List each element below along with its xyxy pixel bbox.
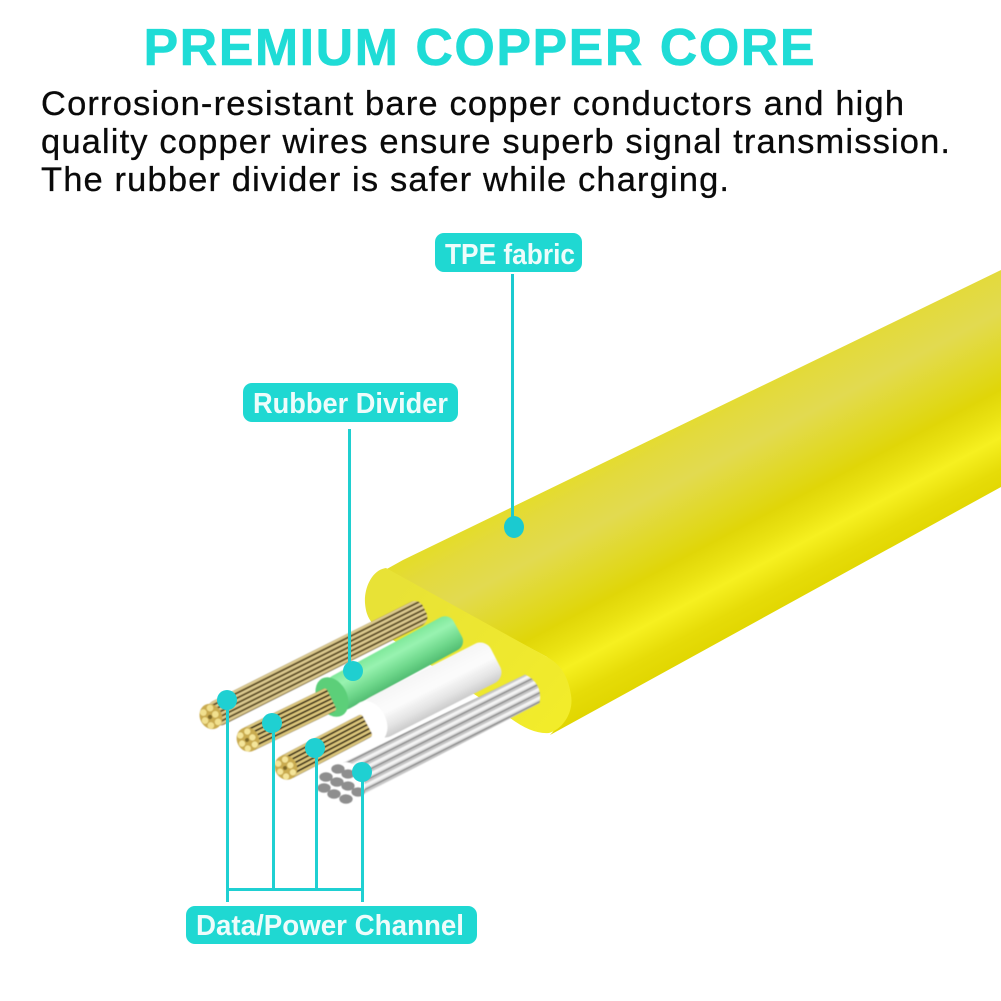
label: Rubber Divider: Rubber Divider: [253, 388, 448, 420]
silver wire end strands: [317, 764, 365, 804]
yellow cable: [365, 270, 1001, 735]
title: PREMIUM COPPER CORE: [144, 19, 814, 77]
green rubber divider: [309, 611, 468, 723]
white insulated tube: [346, 638, 506, 749]
lower copper wire: [270, 714, 373, 784]
description text: Corrosion-resistant bare copper conductors and high: [41, 85, 904, 123]
description text: [41, 85, 950, 199]
pointer: Rubber Divider: [343, 429, 363, 681]
middle copper wire: [233, 688, 337, 756]
description text: quality copper wires ensure superb signal transmission.: [41, 123, 950, 161]
pointer: TPE fabric: [504, 274, 524, 538]
label: TPE fabric: TPE fabric: [445, 239, 575, 271]
silver wire: [332, 669, 546, 802]
cable end cap: [365, 568, 571, 733]
top copper wire: [195, 598, 430, 733]
pointers: Data/Power Channel: [217, 690, 372, 902]
label: Data/Power Channel: Data/Power Channel: [196, 910, 464, 942]
description text: The rubber divider is safer while charging.: [41, 161, 729, 199]
cable sheath body: [385, 270, 1001, 735]
wire bundle: [195, 598, 546, 804]
